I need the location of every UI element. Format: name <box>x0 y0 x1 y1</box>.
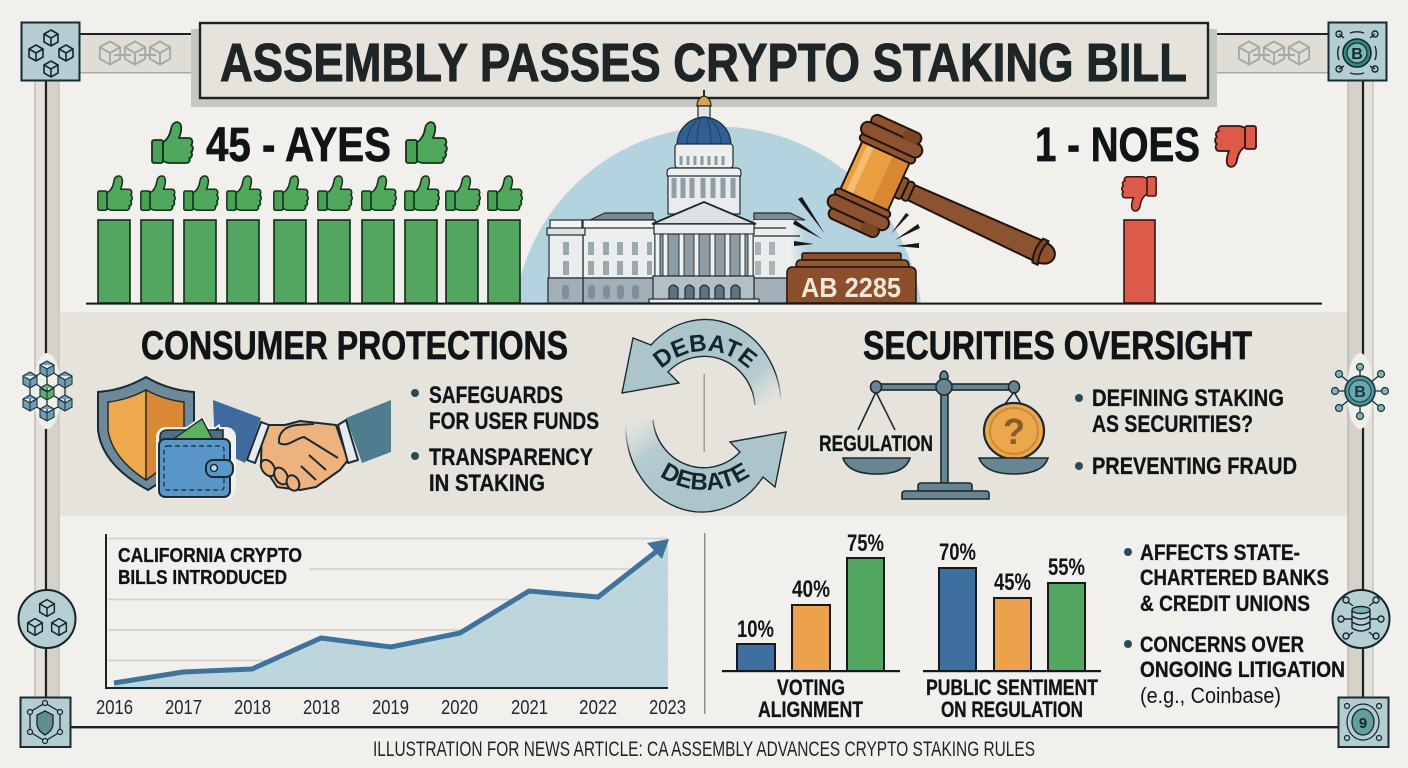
list: securities bullets: DEFINING STAKING <box>1092 385 1284 412</box>
icon: database network badge right <box>1332 590 1390 648</box>
heading: CONSUMER PROTECTIONS <box>141 324 568 368</box>
illustration: gavel block AB 2285 <box>787 253 916 303</box>
list: consumer bullets: SAFEGUARDS <box>429 382 563 409</box>
list: impact bullets: CONCERNS OVER <box>1140 632 1304 657</box>
icon: cube chain left <box>100 41 170 65</box>
list: impact bullets: (e.g., Coinbase) <box>1140 683 1281 708</box>
list: securities bullets: PREVENTING FRAUD <box>1092 453 1297 480</box>
illustration: debate cycle arrows: DEBATE <box>660 462 750 490</box>
list: securities bullets <box>1075 385 1297 480</box>
chart: green aye bars <box>98 220 520 303</box>
chart: voting alignment <box>722 530 900 722</box>
year labels: 2019 <box>372 697 409 719</box>
axes <box>106 534 668 688</box>
year labels: 2022 <box>579 697 617 719</box>
list: consumer bullets: TRANSPARENCY <box>429 444 593 471</box>
baseline <box>86 303 1322 305</box>
panel: consumer protections <box>98 324 599 499</box>
section: vote tally <box>98 119 1256 303</box>
year labels: 2020 <box>441 697 478 719</box>
year labels: 2017 <box>165 697 202 719</box>
heading: 1 noes: 1 - NOES <box>1035 119 1200 172</box>
label: regulation: REGULATION <box>819 431 933 456</box>
list: consumer bullets: FOR USER FUNDS <box>429 408 599 435</box>
chart: public sentiment on regulation: 45% <box>994 569 1031 596</box>
area <box>114 540 668 687</box>
chart title <box>118 545 302 589</box>
icon: cube chain right <box>1239 41 1309 65</box>
chart title: BILLS INTRODUCED <box>118 567 287 589</box>
portico <box>649 202 759 303</box>
chart: voting alignment: VOTING <box>777 675 845 700</box>
chart: voting alignment: 40% <box>792 576 830 603</box>
list: consumer bullets: IN STAKING <box>429 470 545 497</box>
icon: thumb down small <box>1122 177 1156 211</box>
chart: public sentiment on regulation: 70% <box>939 539 976 566</box>
icons: row of thumbs up <box>98 176 522 210</box>
list: impact bullets: & CREDIT UNIONS <box>1140 591 1310 616</box>
year labels: 2023 <box>649 697 686 719</box>
chart: public sentiment on regulation: PUBLIC SENTIMENT <box>926 675 1098 700</box>
illustration: gavel block AB 2285: AB 2285 <box>801 272 901 303</box>
icon: shield <box>98 377 194 490</box>
panel: securities oversight <box>819 324 1297 499</box>
illustration: state capitol <box>547 90 806 303</box>
heading: SECURITIES OVERSIGHT <box>863 324 1252 368</box>
icon: corner coin bottom right: 9 <box>1359 715 1367 732</box>
list: securities bullets: AS SECURITIES? <box>1092 411 1253 438</box>
year labels: 2016 <box>96 697 133 719</box>
chart: voting alignment: ALIGNMENT <box>758 697 863 722</box>
chart title: CALIFORNIA CRYPTO <box>118 545 302 567</box>
year labels <box>96 697 686 719</box>
divider <box>704 533 706 714</box>
icon: corner bitcoin top right <box>1328 22 1386 80</box>
chart: voting alignment: 75% <box>847 530 884 557</box>
icon: cube cluster badge left <box>18 590 76 648</box>
roof wings <box>590 213 805 220</box>
illustration: debate cycle arrows: DEBATE <box>652 334 758 368</box>
caption: ILLUSTRATION FOR NEWS ARTICLE: CA ASSEMBLY ADVANCES CRYPTO STAKING RULES <box>373 738 1035 761</box>
icon: side node cluster left <box>23 353 72 429</box>
chart: red noes bar <box>1124 220 1155 303</box>
icon: side bitcoin network right: B <box>1354 384 1366 401</box>
gridlines <box>108 538 668 660</box>
list: impact bullets: AFFECTS STATE- <box>1140 540 1300 565</box>
illustration: gavel <box>821 110 1078 310</box>
arrowhead <box>647 539 669 559</box>
icon: corner cubes top left <box>22 22 80 80</box>
chart: voting alignment: 10% <box>737 616 774 643</box>
list: impact bullets <box>1124 540 1345 708</box>
list: impact bullets: CHARTERED BANKS <box>1140 565 1329 590</box>
icon: corner coin bottom right <box>1338 698 1388 747</box>
illustration: impact lines <box>793 197 920 248</box>
icon: wallet <box>156 419 236 499</box>
title banner <box>191 23 1217 107</box>
heading: 45 ayes: 45 - AYES <box>206 119 391 172</box>
chart: capitol backdrop circle <box>515 127 921 303</box>
chart: california crypto bills line chart <box>96 534 686 719</box>
year labels: 2018 <box>303 697 340 719</box>
list: consumer bullets <box>411 382 599 497</box>
chart: public sentiment on regulation: ON REGULATION <box>941 697 1083 722</box>
icon: corner shield network bottom left <box>20 698 70 747</box>
chart: public sentiment on regulation: 55% <box>1048 554 1085 581</box>
title banner: ASSEMBLY PASSES CRYPTO STAKING BILL <box>220 33 1187 93</box>
list: impact bullets: ONGOING LITIGATION <box>1140 657 1345 682</box>
icon: handshake <box>213 400 391 493</box>
trend line <box>114 551 657 683</box>
icon: side bitcoin network right <box>1332 353 1388 429</box>
illustration: debate cycle arrows <box>621 318 787 513</box>
icon: corner bitcoin top right: B <box>1351 46 1363 63</box>
icon: balance scale: ? <box>1003 411 1025 452</box>
year labels: 2018 <box>234 697 271 719</box>
year labels: 2021 <box>511 697 548 719</box>
left wing <box>547 220 655 303</box>
icon: balance scale <box>843 371 1048 499</box>
chart: public sentiment on regulation <box>923 539 1101 722</box>
panel: debate band <box>60 312 1348 516</box>
right wing <box>754 220 806 303</box>
